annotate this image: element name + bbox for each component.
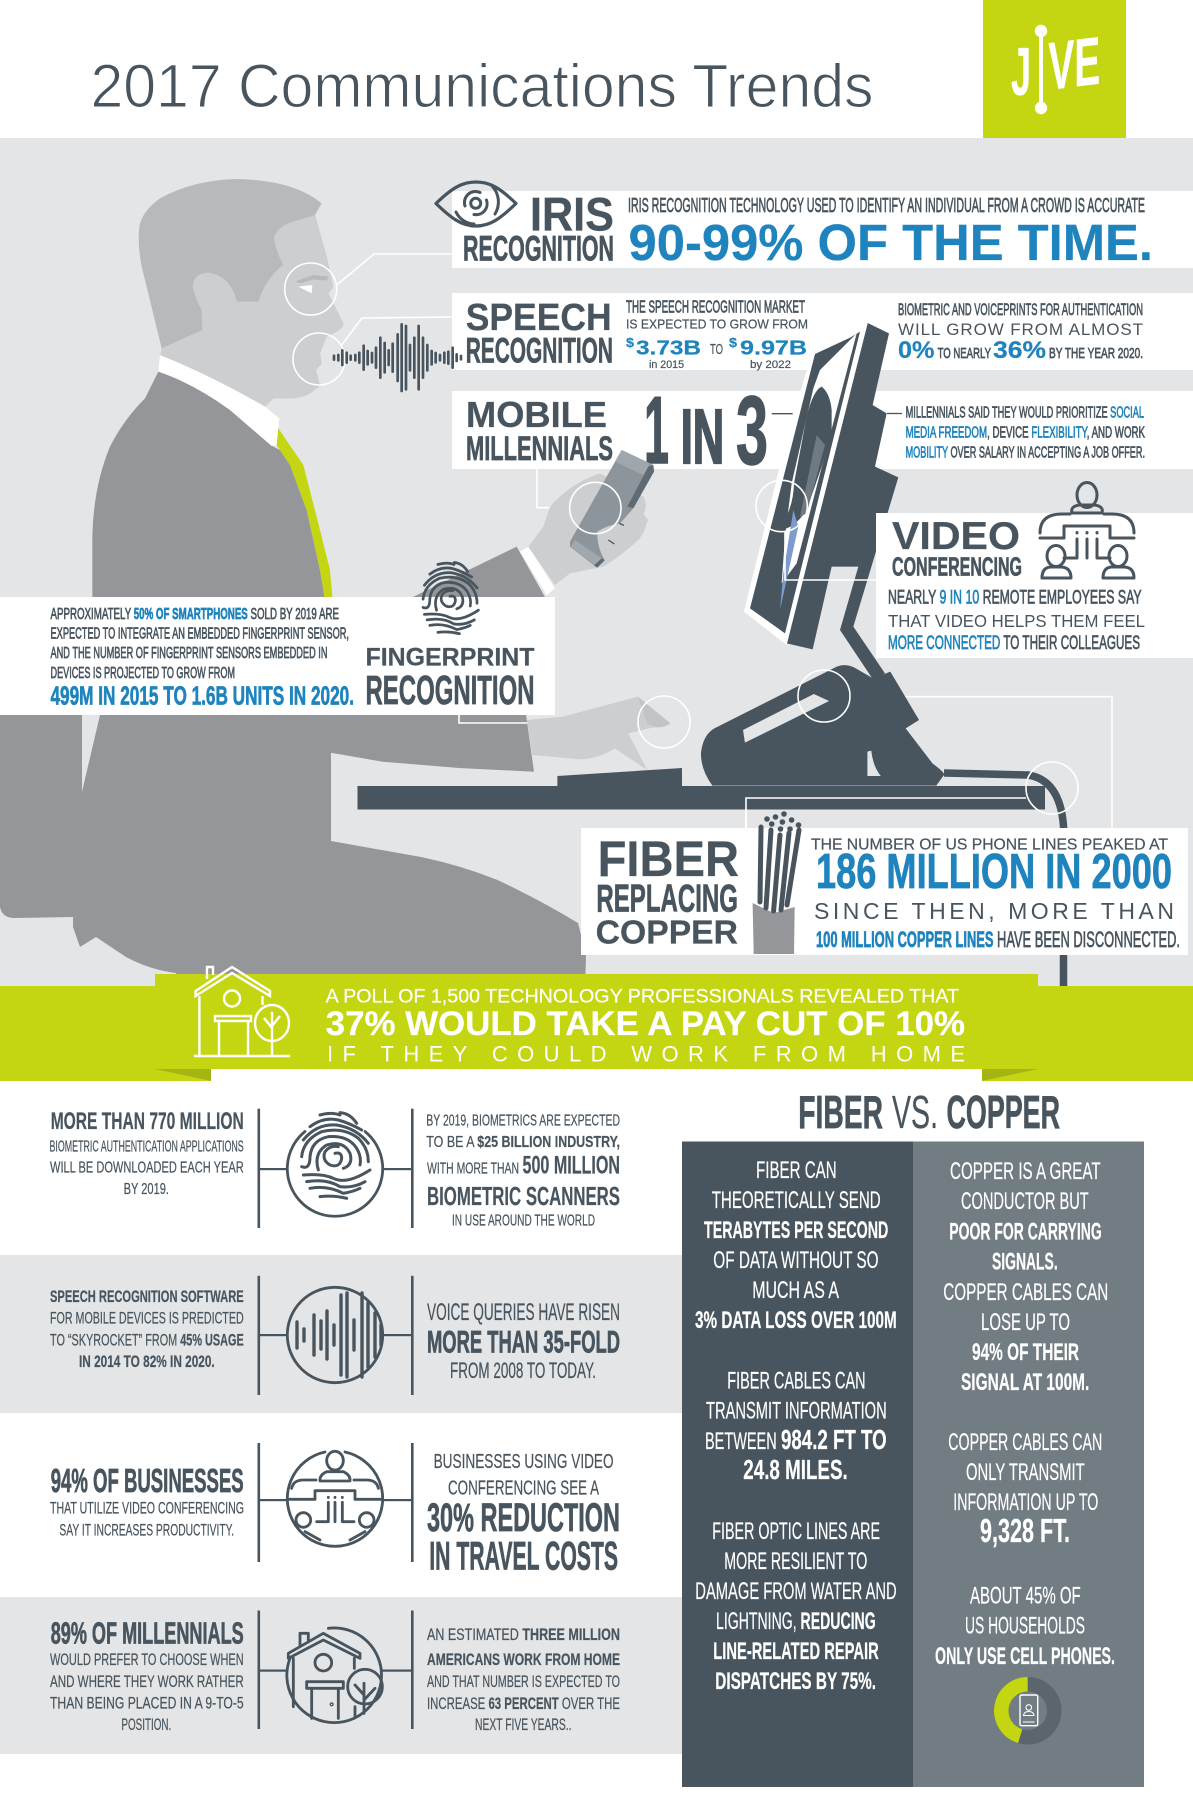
panel: fiber column: TERABYTES PER SECOND <box>704 1217 888 1244</box>
text: video statistic <box>888 587 1145 654</box>
panel: fingerprint white box <box>0 597 555 715</box>
text: poll <box>326 985 965 1067</box>
illustration: man upper body <box>92 179 555 600</box>
text: speech software: IN 2014 TO 82% IN 2020. <box>79 1353 215 1371</box>
panel: fiber column: BETWEEN <box>705 1428 777 1455</box>
text: speech market: 9.97B <box>740 337 807 359</box>
text: biometric apps <box>50 1108 244 1198</box>
text: millennials flexibility: AND WHERE THEY WORK RATHER <box>50 1673 244 1691</box>
heading: speech recognition: SPEECH <box>466 297 612 339</box>
connector line over desk <box>746 798 1026 828</box>
text: biometric industry: 500 MILLION <box>522 1151 620 1179</box>
chart: 45% donut with phone <box>1001 1684 1054 1737</box>
heading: mobile millennials <box>466 394 613 468</box>
text: biometric industry: WITH MORE THAN <box>427 1160 519 1177</box>
text: fingerprint statistic: APPROXIMATELY 50% OF SMARTPHONES SOLD BY 2019 ARE <box>50 606 339 623</box>
panel: fiber column: 24.8 MILES. <box>743 1454 848 1485</box>
text: voice queries: FROM 2008 TO TODAY. <box>450 1358 596 1383</box>
illustration: hand holding phone <box>528 450 654 585</box>
panel: copper column: COPPER IS A GREAT <box>950 1158 1101 1185</box>
heading: speech recognition: RECOGNITION <box>466 332 613 371</box>
icon: conference phone <box>1040 482 1134 578</box>
text: businesses productivity: 94% OF BUSINESSES <box>51 1462 244 1499</box>
heading: fiber vs copper: FIBER <box>798 1086 883 1138</box>
heading: video conferencing: VIDEO <box>892 515 1020 558</box>
panel: copper column: INFORMATION UP TO <box>953 1489 1098 1516</box>
panel: copper column: ABOUT 45% OF <box>970 1583 1081 1610</box>
text: millennials flexibility <box>50 1615 244 1734</box>
text: biometric apps: BIOMETRIC AUTHENTICATION APPLICATIONS <box>50 1138 244 1156</box>
heading: fingerprint recognition: RECOGNITION <box>366 667 534 713</box>
text: travel costs: BUSINESSES USING VIDEO <box>434 1451 614 1473</box>
text: businesses productivity: THAT UTILIZE VIDEO CONFERENCING <box>50 1500 244 1518</box>
text: poll: IF THEY COULD WORK FROM HOME <box>327 1042 965 1067</box>
text: work from home: AMERICANS WORK FROM HOME <box>427 1650 620 1669</box>
text: speech market: IS EXPECTED TO GROW FROM <box>626 317 808 332</box>
illustration: computer monitor <box>744 323 898 680</box>
icon: fingerprint <box>423 563 478 634</box>
text: fingerprint statistic: AND THE NUMBER OF FINGERPRINT SENSORS EMBEDDED IN <box>50 645 328 662</box>
panel: copper column: ONLY TRANSMIT <box>966 1459 1085 1486</box>
text: voiceprints statistic: TO NEARLY <box>938 345 991 362</box>
icon: video conference in circle <box>287 1451 383 1546</box>
logo: Jive: VE <box>1048 23 1100 105</box>
heading: video conferencing <box>892 515 1022 582</box>
heading: fiber replacing copper: COPPER <box>596 913 738 950</box>
panel: fiber column: LIGHTNING, REDUCING <box>716 1608 876 1635</box>
heading: iris recognition <box>463 188 614 269</box>
panel: copper column <box>913 1142 1144 1787</box>
text: work from home: AND THAT NUMBER IS EXPECTED TO <box>427 1673 620 1691</box>
text: millennials flexibility: POSITION. <box>121 1716 171 1734</box>
heading: fiber vs copper: COPPER <box>946 1086 1060 1138</box>
grey illustration background <box>0 138 1193 988</box>
text: phone lines statistic <box>811 836 1180 952</box>
heading: fiber replacing copper: FIBER <box>598 831 739 887</box>
connector lines and callout circles <box>285 254 1112 828</box>
title: 2017 Communications Trends <box>90 52 874 120</box>
panel: fiber column: MUCH AS A <box>752 1277 839 1304</box>
panel: fiber column <box>682 1142 913 1787</box>
text: travel costs: 30% REDUCTION <box>427 1496 620 1540</box>
text: businesses productivity: SAY IT INCREASES PRODUCTIVITY. <box>59 1521 234 1539</box>
text: businesses productivity <box>50 1462 244 1539</box>
panel: iris white box <box>452 191 1193 268</box>
text: travel costs <box>427 1451 620 1578</box>
panel: fiber column: TRANSMIT INFORMATION <box>706 1397 887 1424</box>
text: voiceprints statistic: BY THE YEAR 2020. <box>1049 345 1143 362</box>
number: 1 in 3: 3 <box>736 376 768 485</box>
illustration: cable <box>944 773 1064 986</box>
text: speech software: SPEECH RECOGNITION SOFTWARE <box>50 1288 244 1306</box>
heading: video conferencing: CONFERENCING <box>892 552 1022 582</box>
text: fingerprint statistic: DEVICES IS PROJECTED TO GROW FROM <box>50 665 235 682</box>
text: voiceprints statistic: 36% <box>993 337 1046 364</box>
illustration: hand on keyboard <box>527 697 670 770</box>
heading: iris recognition: IRIS <box>530 188 614 241</box>
panel: fiber replacing copper <box>581 828 1188 955</box>
text: phone lines statistic: THE NUMBER OF US PHONE LINES PEAKED AT <box>811 836 1169 853</box>
text: biometric industry <box>426 1112 620 1230</box>
icon: sound wave in circle <box>287 1287 383 1383</box>
panel: fiber column: FIBER OPTIC LINES ARE <box>712 1518 880 1545</box>
icon: house in circle <box>287 1628 382 1723</box>
heading: fingerprint recognition: FINGERPRINT <box>366 644 534 672</box>
text: biometric apps: WILL BE DOWNLOADED EACH YEAR <box>50 1159 244 1176</box>
text: speech software: TO “SKYROCKET” FROM 45% USAGE <box>50 1332 244 1350</box>
text: speech market: 3.73B <box>636 337 701 359</box>
panel: fiber column: LINE-RELATED REPAIR <box>713 1638 879 1665</box>
illustration: desk and keyboard <box>358 768 1045 810</box>
text: voice queries <box>427 1299 620 1383</box>
panel: fiber column: MORE RESILIENT TO <box>724 1548 867 1575</box>
grey row background: speech <box>0 1255 682 1413</box>
text: speech market: in 2015 <box>649 359 684 371</box>
text: voice queries: MORE THAN 35-FOLD <box>427 1323 620 1359</box>
heading: mobile millennials: MOBILE <box>466 394 607 435</box>
text: voiceprints statistic: WILL GROW FROM ALMOST <box>898 320 1143 339</box>
panel: fiber column: 984.2 FT TO <box>781 1424 887 1455</box>
heading: fiber replacing copper: REPLACING <box>596 878 738 921</box>
heading: mobile millennials: MILLENNIALS <box>466 430 613 468</box>
panel: video conferencing <box>876 482 1193 658</box>
text: speech software: FOR MOBILE DEVICES IS PREDICTED <box>50 1310 244 1328</box>
text: speech market: $ <box>729 335 738 350</box>
heading: fiber replacing copper <box>596 831 739 950</box>
text: voiceprints statistic <box>898 300 1143 364</box>
panel: copper column: 94% OF THEIR <box>972 1339 1079 1366</box>
text: speech software <box>50 1288 244 1371</box>
text: fingerprint statistic <box>50 606 354 710</box>
text: voice queries: VOICE QUERIES HAVE RISEN <box>427 1299 620 1326</box>
text: millennials flexibility: THAN BEING PLACED IN A 9-TO-5 <box>50 1694 244 1712</box>
icon: house <box>194 967 290 1056</box>
number: 1 in 3: IN <box>681 394 724 480</box>
text: work from home: AN ESTIMATED THREE MILLION <box>427 1625 620 1644</box>
text: millennials priorities: MEDIA FREEDOM, DEVICE FLEXIBILITY, AND WORK <box>906 424 1145 441</box>
panel: copper column: LOSE UP TO <box>981 1309 1070 1336</box>
panel: fiber column: DAMAGE FROM WATER AND <box>695 1578 897 1605</box>
panel: copper column: US HOUSEHOLDS <box>965 1613 1085 1640</box>
panel: fiber column: OF DATA WITHOUT SO <box>713 1247 879 1274</box>
panel: fiber column: 3% DATA LOSS OVER 100M <box>695 1307 897 1334</box>
icon: eye <box>436 182 516 226</box>
text: video statistic: THAT VIDEO HELPS THEM FEEL <box>888 611 1145 631</box>
text: speech market: TO <box>710 341 723 358</box>
illustration: monitor base <box>701 665 944 786</box>
text: speech market <box>626 297 808 371</box>
icon: sound wave <box>334 324 461 391</box>
text: speech market: THE SPEECH RECOGNITION MARKET <box>626 297 805 317</box>
text: poll: A POLL OF 1,500 TECHNOLOGY PROFESSIONALS REVEALED THAT <box>326 985 959 1007</box>
number: 1 in 3: 1 <box>644 377 669 484</box>
text: biometric industry: BY 2019, BIOMETRICS ARE EXPECTED <box>426 1112 620 1130</box>
logo: Jive <box>983 0 1126 138</box>
panel: mobile white box <box>452 391 1193 469</box>
panel: copper column: CONDUCTOR BUT <box>961 1188 1089 1215</box>
text: biometric apps: BY 2019. <box>124 1181 169 1198</box>
text: work from home <box>427 1625 620 1734</box>
panel: fiber column: THEORETICALLY SEND <box>712 1187 881 1214</box>
text: iris statistic: 90-99% OF THE TIME. <box>628 214 1153 271</box>
text: biometric apps: MORE THAN 770 MILLION <box>51 1108 244 1135</box>
panel: copper column: 9,328 FT. <box>980 1512 1070 1549</box>
panel: speech white box <box>452 293 1193 370</box>
illustration: man lower body and chair <box>0 700 586 990</box>
grey row background: home <box>0 1597 682 1754</box>
text: work from home: NEXT FIVE YEARS.. <box>475 1716 572 1734</box>
panel: copper column: SIGNAL AT 100M. <box>961 1369 1089 1396</box>
text: millennials priorities <box>887 405 1145 461</box>
heading: fiber vs copper: VS. <box>892 1086 938 1138</box>
text: travel costs: CONFERENCING SEE A <box>448 1477 599 1499</box>
text: millennials flexibility: WOULD PREFER TO CHOOSE WHEN <box>50 1651 244 1669</box>
callout circles: keyboard, base, cable <box>638 670 1078 814</box>
text: fingerprint statistic: EXPECTED TO INTEGRATE AN EMBEDDED FINGERPRINT SENSOR, <box>50 625 349 642</box>
heading: speech recognition <box>466 297 613 371</box>
text: biometric industry: IN USE AROUND THE WORLD <box>452 1213 595 1230</box>
text: fingerprint statistic: 499M IN 2015 TO 1.6B UNITS IN 2020. <box>50 682 354 710</box>
logo: Jive: J <box>1011 34 1031 110</box>
panel: fiber column: FIBER CABLES CAN <box>727 1367 866 1394</box>
text: millennials flexibility: 89% OF MILLENNIALS <box>51 1615 244 1650</box>
text: voiceprints statistic: 0% <box>898 337 934 364</box>
text: poll: 37% WOULD TAKE A PAY CUT OF 10% <box>326 1005 965 1043</box>
text: phone lines statistic: SINCE THEN, MORE THAN <box>814 898 1174 924</box>
icon: fiber cable <box>753 811 801 954</box>
panel: fiber column: DISPATCHES BY 75%. <box>715 1668 876 1695</box>
panel: copper column: SIGNALS. <box>992 1248 1058 1275</box>
heading: fiber vs copper <box>798 1086 1060 1138</box>
text: speech market: by 2022 <box>750 359 791 371</box>
green band <box>0 967 1193 1081</box>
heading: fingerprint recognition <box>366 644 534 713</box>
panel: fiber column: FIBER CAN <box>756 1157 837 1184</box>
text: speech market: $ <box>626 335 635 350</box>
text: work from home: INCREASE 63 PERCENT OVER THE <box>427 1695 620 1713</box>
text: biometric industry: TO BE A $25 BILLION INDUSTRY, <box>426 1134 620 1151</box>
number: 1 in 3 <box>644 376 793 485</box>
heading: iris recognition: RECOGNITION <box>463 230 614 269</box>
text: biometric industry: BIOMETRIC SCANNERS <box>427 1181 620 1211</box>
icon: fingerprint in circle <box>287 1113 383 1216</box>
text: travel costs: IN TRAVEL COSTS <box>429 1534 618 1578</box>
row dividers <box>258 1109 414 1729</box>
